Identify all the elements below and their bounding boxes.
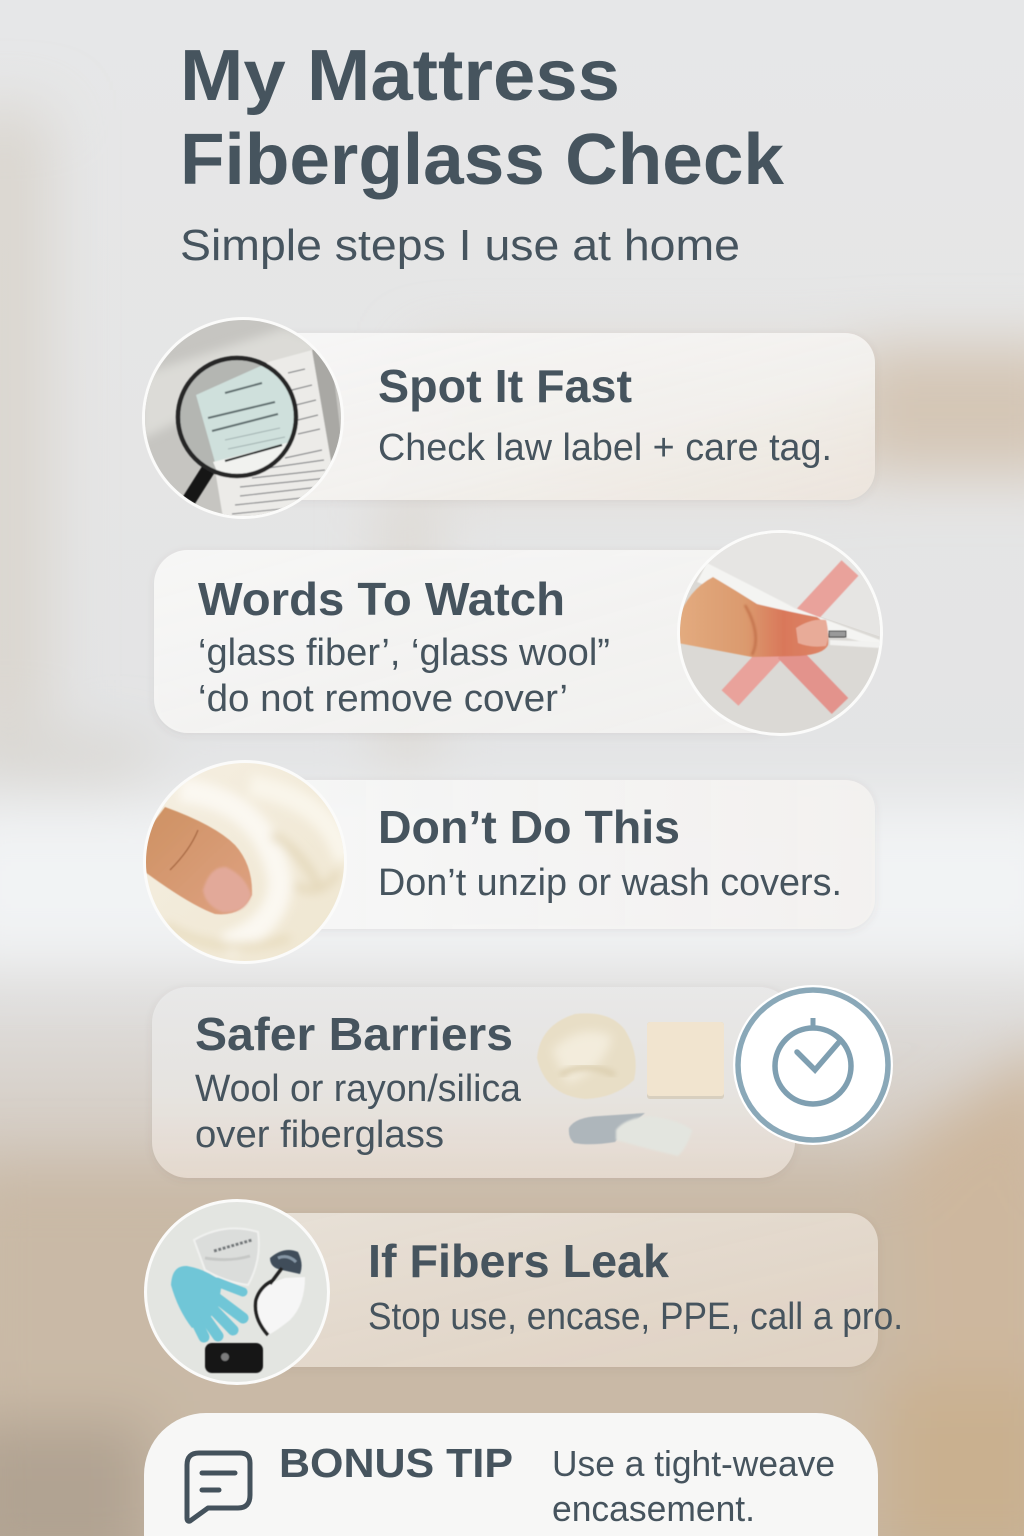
- heading: don't do this: Don’t Do This: [378, 801, 680, 853]
- icon: latex square: [647, 1022, 724, 1099]
- text: tight-weave encasement: encasement.: [552, 1488, 755, 1529]
- title: [180, 36, 785, 200]
- heading: words to watch: Words To Watch: [198, 573, 565, 625]
- text: tight-weave encasement: Use a tight-weave: [552, 1443, 835, 1484]
- text: watch words: ‘do not remove cover’: [198, 678, 568, 720]
- heading: safer barriers: Safer Barriers: [195, 1008, 513, 1060]
- title: My Mattress: [180, 36, 620, 116]
- panel: spot it fast: [140, 315, 875, 530]
- text: wool or rayon: [195, 1068, 522, 1156]
- title: Fiberglass Check: [180, 120, 785, 200]
- text: tight-weave encasement: [552, 1443, 835, 1529]
- text: watch words: [198, 632, 610, 720]
- icon: finger pressing wool: [140, 758, 350, 968]
- icon: speech bubble: [187, 1453, 250, 1521]
- text: don't unzip: Don’t unzip or wash covers.: [378, 862, 842, 904]
- subtitle: Simple steps I use at home: [180, 221, 740, 270]
- icon: timer check badge: [733, 985, 893, 1145]
- panel: words to watch: [154, 525, 890, 740]
- icon: rayon silica swatch: [569, 1113, 692, 1156]
- heading: spot it fast: Spot It Fast: [378, 360, 632, 412]
- heading: bonus tip: BONUS TIP: [279, 1440, 513, 1486]
- text: stop use: Stop use, encase, PPE, call a pro.: [368, 1296, 903, 1338]
- text: wool or rayon: over fiberglass: [195, 1114, 444, 1156]
- panel: if fibers leak: [140, 1195, 903, 1390]
- icon: wool ball: [537, 1013, 636, 1099]
- icon: finger under cover with red cross: [677, 530, 883, 736]
- text: watch words: ‘glass fiber’, ‘glass wool”: [198, 632, 610, 674]
- icon: magnifier over label: [140, 315, 350, 530]
- heading: if fibers leak: If Fibers Leak: [368, 1235, 669, 1287]
- text: check label: Check law label + care tag.: [378, 427, 832, 469]
- panel: don't do this: [140, 758, 875, 968]
- panel: bonus tip: [144, 1413, 878, 1536]
- text: wool or rayon: Wool or rayon/silica: [195, 1068, 522, 1110]
- icon: protective gear: [140, 1195, 335, 1390]
- panel: safer barriers: [152, 985, 893, 1178]
